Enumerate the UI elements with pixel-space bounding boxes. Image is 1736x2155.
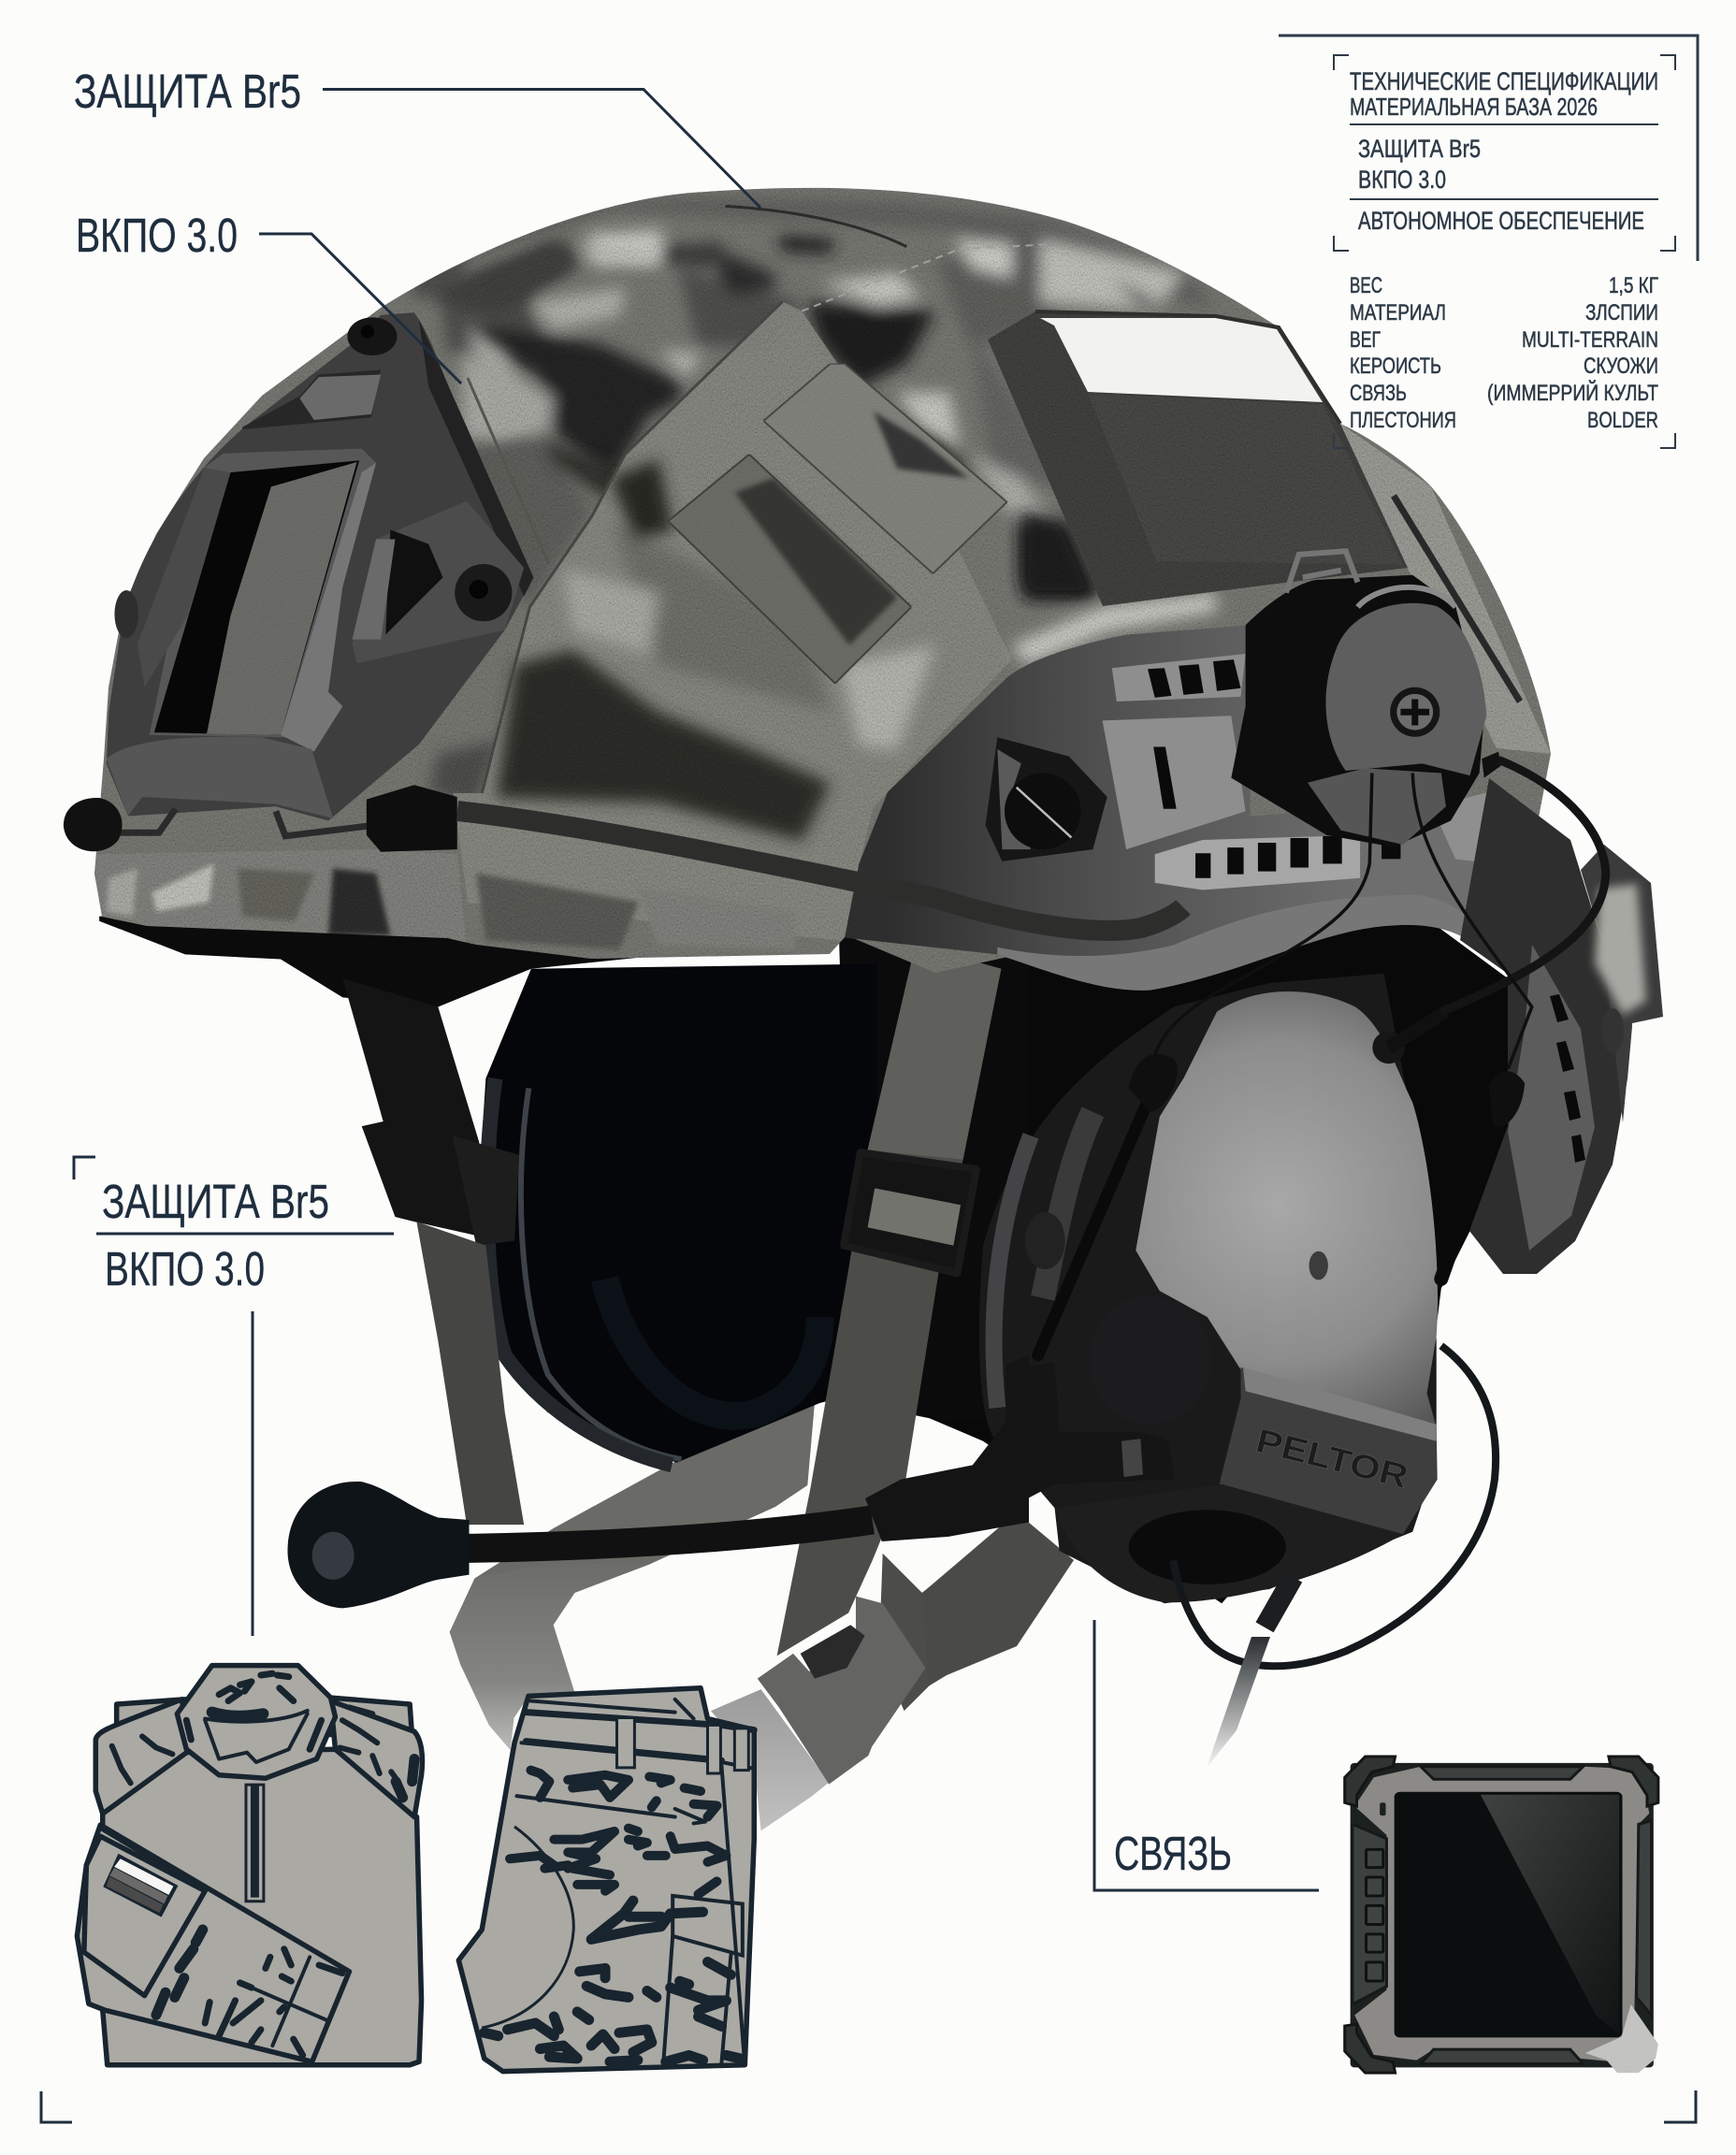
- front pocket seam: [517, 1796, 705, 1823]
- tablet grey bezel: [1354, 1767, 1649, 2062]
- phillips screw: [1390, 687, 1439, 737]
- spec rows left: ПЛЕСТОНИЯ: [1350, 408, 1456, 433]
- tablet screen: [1395, 1792, 1622, 2037]
- outer frame corner: [1279, 36, 1698, 261]
- page corner bracket: bottom left: [41, 2091, 72, 2122]
- lower wire loop: [1173, 1346, 1496, 1666]
- recess: [353, 501, 524, 663]
- callout: uniform label: ВКПО 3.0: [105, 1242, 265, 1295]
- tablet camera: [1380, 1802, 1386, 1815]
- right shoulder: [331, 1701, 422, 1817]
- raised bars: [1103, 716, 1246, 849]
- waistband: [522, 1699, 754, 1773]
- callout: СВЯЗЬ: СВЯЗЬ: [1114, 1827, 1232, 1880]
- ear cup cushion: [979, 974, 1437, 1603]
- ladder buckle: [844, 1152, 976, 1273]
- rear cover seam: [1394, 496, 1520, 701]
- rod caps: [1025, 1054, 1525, 1269]
- cargo pocket: [663, 1765, 745, 2065]
- folded sleeve: [77, 1825, 349, 2061]
- front brim camouflage: [94, 849, 795, 949]
- folded combat shirt illustration: [77, 1666, 422, 2065]
- collar: [177, 1666, 335, 1778]
- spec rows left: МАТЕРИАЛ: [1350, 300, 1446, 325]
- spec header list: АВТОНОМНОЕ ОБЕСПЕЧЕНИЕ: [1358, 207, 1644, 235]
- wire ring on the shell: [1372, 1012, 1446, 1063]
- spec header list: ВКПО 3.0: [1358, 166, 1446, 194]
- callout: ЗАЩИТА Br5 top: [74, 65, 760, 208]
- slotted screw socket: [986, 737, 1107, 861]
- shroud body: [107, 312, 533, 821]
- microphone head: [287, 1482, 470, 1608]
- flap stitching: [468, 206, 1049, 793]
- underside band: [99, 917, 1029, 1422]
- spec rows left: ВЕГ: [1350, 327, 1381, 353]
- callout: ВКПО 3.0 top: [76, 209, 461, 383]
- spec brackets: [1334, 55, 1675, 448]
- spec rows right: BOLDER: [1587, 408, 1658, 433]
- shell pin: [1309, 1251, 1328, 1280]
- cushion tone: [605, 1279, 820, 1416]
- lower band: [997, 895, 1508, 991]
- spec rows right: [1487, 273, 1658, 433]
- spec rows left: СВЯЗЬ: [1350, 381, 1407, 406]
- left cover camouflage: [428, 239, 658, 806]
- headband rods: [1038, 1074, 1511, 1355]
- spec rows right: СКУОЖИ: [1584, 354, 1658, 379]
- fabric helmet cover: [84, 178, 1581, 1001]
- upper strap loop: [763, 364, 1007, 573]
- cable connector: [367, 785, 457, 852]
- boom sleeve: [865, 1355, 1029, 1541]
- boom tube: [457, 1520, 873, 1549]
- right ear cup with PELTOR module: [935, 974, 1525, 1666]
- black headset mount: [1231, 575, 1484, 847]
- main window frame: [150, 449, 376, 737]
- left lower webbing: [416, 1222, 524, 1525]
- chinstrap ball: [64, 798, 123, 851]
- spec header list: [1358, 135, 1644, 235]
- upper window: [242, 369, 381, 429]
- zipper: [246, 1785, 264, 1902]
- side accessory rail: [845, 551, 1532, 991]
- shirt back layer: [117, 1698, 412, 1736]
- mount clip: [1286, 551, 1358, 593]
- tablet body: [1351, 1763, 1654, 2067]
- strap loops on the cover: [668, 364, 1007, 684]
- helmet photograph: [64, 178, 1663, 1830]
- panel: technical specifications: [1279, 36, 1698, 448]
- bolts: [114, 317, 512, 638]
- callout: СВЯЗЬ: [1094, 1620, 1319, 1890]
- callout: uniform label: [74, 1157, 394, 1636]
- callout: ЗАЩИТА Br5 top: ЗАЩИТА Br5: [74, 65, 301, 118]
- sleeve flag patch: [105, 1856, 176, 1916]
- cup shell: [1136, 991, 1438, 1427]
- shirt torso: [103, 1749, 422, 2065]
- fading headset cable: [1207, 1637, 1270, 1768]
- spec title: [1350, 67, 1658, 121]
- upper wires: [1155, 759, 1606, 1069]
- spec title: МАТЕРИАЛЬНАЯ БАЗА 2026: [1350, 93, 1598, 121]
- spec rows right: ЗЛСПИИ: [1585, 300, 1658, 325]
- helmet interior and left ear cup: [99, 917, 1029, 1656]
- tablet top and bottom grips: [1353, 1767, 1652, 2064]
- spec rows left: ВЕС: [1350, 273, 1382, 298]
- callout: uniform label: ЗАЩИТА Br5: [102, 1175, 329, 1228]
- shadow behind ear cup: [917, 878, 1527, 1603]
- spec rows right: (ИММЕРРИЙ КУЛЬТ: [1487, 380, 1658, 406]
- pocket flap: [454, 301, 1216, 941]
- rugged tablet illustration: [1345, 1757, 1658, 2073]
- callout: ВКПО 3.0 top: ВКПО 3.0: [76, 209, 238, 262]
- trousers silhouette: [458, 1688, 754, 2072]
- cup rim highlight: [521, 1088, 682, 1459]
- center strap: [777, 945, 1001, 1656]
- corner screen reflection: [1585, 2004, 1658, 2073]
- right lower strap: [922, 1512, 1074, 1685]
- lower strap loop: [668, 455, 911, 684]
- boom root: [935, 1363, 1174, 1532]
- sleeve pocket: [84, 1836, 205, 1996]
- spec rows left: КЕРОИСТЬ: [1350, 354, 1441, 379]
- spec rows left: [1350, 273, 1456, 433]
- rear rail and pouch: [1460, 778, 1663, 1274]
- shroud left rib: [137, 468, 230, 687]
- foam microphone: [1089, 1295, 1211, 1425]
- left upper strap: [342, 978, 500, 1241]
- cover base: [84, 178, 1581, 1001]
- spec header list: ЗАЩИТА Br5: [1358, 135, 1481, 163]
- page corner bracket: bottom right: [1664, 2090, 1696, 2122]
- front hooks: [113, 809, 371, 836]
- camouflage pattern: [372, 196, 1216, 616]
- cup body: [481, 964, 877, 1463]
- left shoulder: [95, 1699, 191, 1814]
- main window: [154, 460, 359, 735]
- spec rows right: MULTI-TERRAIN: [1522, 327, 1658, 353]
- shirt camouflage marks: [112, 1707, 414, 2055]
- spec rows right: 1,5 КГ: [1609, 273, 1658, 298]
- front NVG shroud: [64, 312, 533, 852]
- lower cup: [1055, 1484, 1403, 1602]
- lit side rib: [281, 463, 376, 752]
- mount disc: [1325, 603, 1486, 775]
- folded combat trousers illustration: [458, 1688, 754, 2072]
- front bungee cable: [457, 811, 1183, 931]
- tablet side buttons: [1367, 1849, 1383, 1981]
- trousers camouflage marks: [485, 1771, 740, 2061]
- PELTOR module: [1220, 1367, 1438, 1534]
- flag velcro patch: [988, 311, 1408, 606]
- ribbed cable: [1265, 1577, 1294, 1627]
- knee patch curve: [482, 1827, 573, 2028]
- tablet corner bumpers: [1345, 1757, 1658, 2073]
- rear cover panel: [1340, 424, 1551, 754]
- screen glare: [1481, 1795, 1619, 2035]
- rear rail slots: [1550, 994, 1585, 1163]
- lower lip: [107, 737, 333, 818]
- PELTOR module: PELTOR: [1252, 1422, 1412, 1496]
- boom microphone: [287, 1355, 1029, 1608]
- rail slots: [1148, 659, 1523, 940]
- lower chin strap and side-release buckle: [450, 1403, 982, 1830]
